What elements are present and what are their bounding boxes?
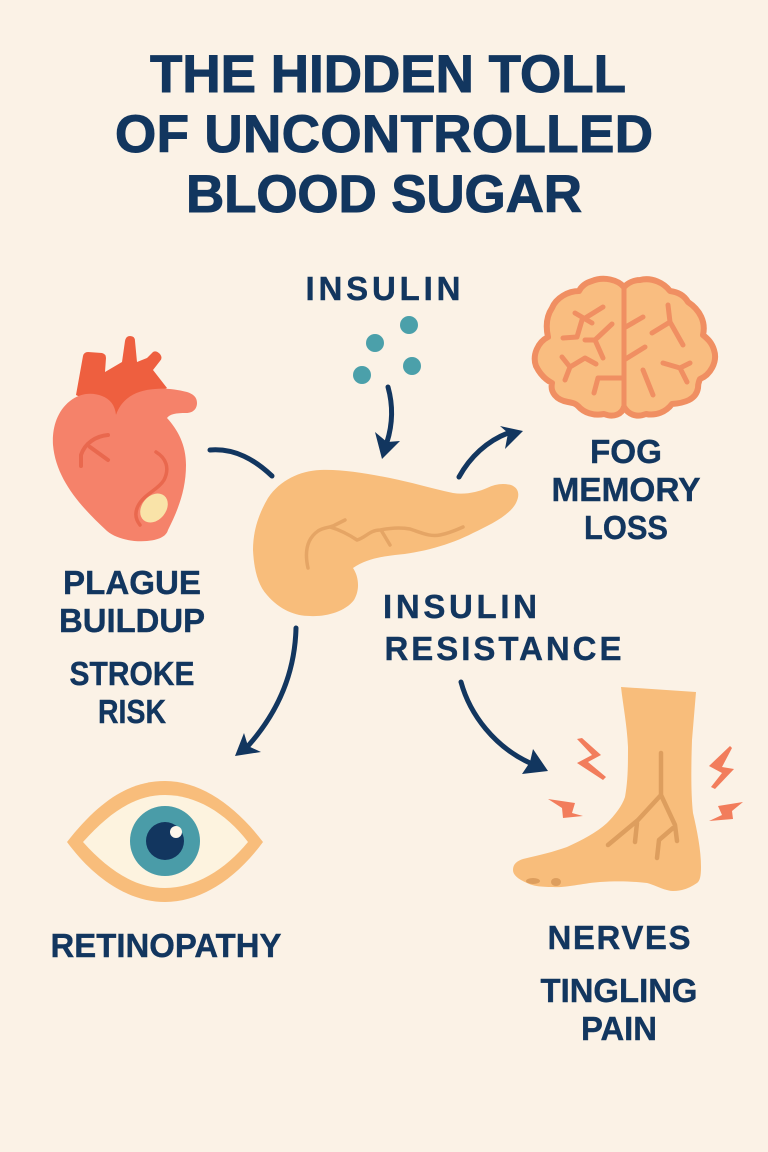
icon: pancreas xyxy=(253,470,518,616)
icon: insulin dots xyxy=(353,316,421,384)
label: foot effects: PAIN xyxy=(581,1010,657,1047)
label: heart effects xyxy=(59,564,205,730)
arrow: resistance to foot xyxy=(461,682,548,774)
title: OF UNCONTROLLED xyxy=(115,105,653,164)
label: insulin: INSULIN xyxy=(306,270,460,307)
arrow: pancreas to brain xyxy=(459,426,523,477)
label: brain effects: MEMORY xyxy=(552,471,700,508)
title: THE HIDDEN TOLL xyxy=(150,45,626,104)
label: brain effects: LOSS xyxy=(584,509,668,546)
title xyxy=(115,45,653,224)
arrow: heart to pancreas xyxy=(210,450,272,476)
label: insulin resistance: RESISTANCE xyxy=(384,630,622,667)
label: heart effects: PLAGUE xyxy=(63,564,201,601)
label: heart effects: BUILDUP xyxy=(59,602,205,639)
arrow: pancreas to eye xyxy=(235,628,296,756)
icon: brain xyxy=(535,279,715,416)
icon: foot xyxy=(513,687,701,891)
icon: heart xyxy=(53,336,197,541)
label: heart effects: RISK xyxy=(98,693,166,730)
label: insulin resistance: INSULIN xyxy=(383,588,537,625)
label: retinopathy: RETINOPATHY xyxy=(50,927,282,964)
label: brain effects: FOG xyxy=(590,433,662,470)
title: BLOOD SUGAR xyxy=(186,165,582,224)
icon: pain bolts xyxy=(548,738,743,821)
icon: eye xyxy=(67,781,263,902)
label: heart effects: STROKE xyxy=(70,655,194,692)
label: insulin resistance xyxy=(383,588,622,667)
arrow: insulin to pancreas xyxy=(375,387,400,459)
label: foot effects: NERVES xyxy=(548,919,690,956)
label: foot effects: TINGLING xyxy=(540,972,698,1009)
label: brain effects xyxy=(552,433,700,546)
label: foot effects xyxy=(540,919,698,1047)
